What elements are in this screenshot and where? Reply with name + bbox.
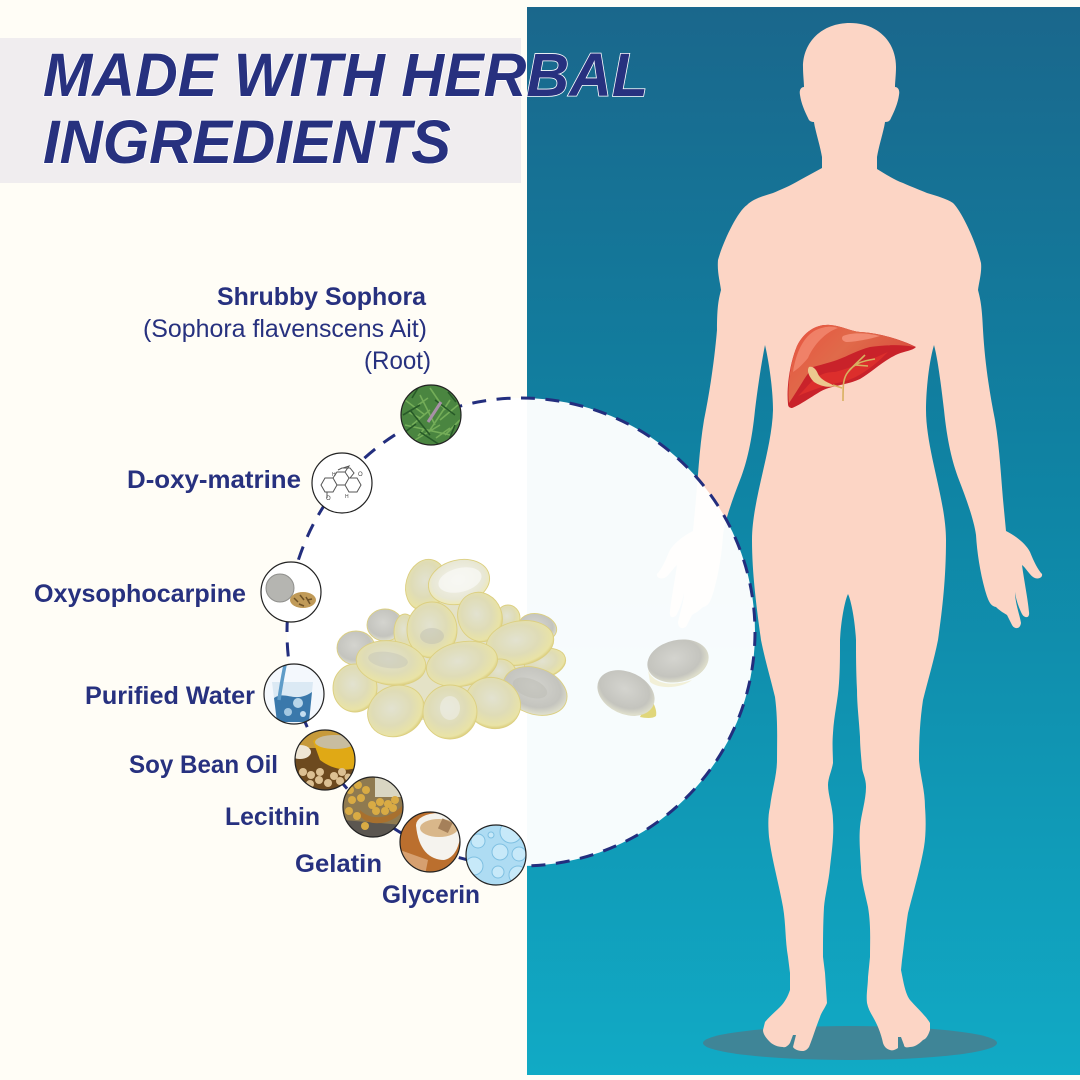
icon: d-oxy-matrine molecule: H <box>332 472 336 478</box>
icon: d-oxy-matrine molecule: H <box>345 494 349 500</box>
ring: purified water <box>264 664 324 724</box>
icon: gelatin bowl <box>400 812 460 872</box>
title band <box>0 38 521 183</box>
label: glycerin: Glycerin <box>382 881 480 909</box>
icon: purified water <box>264 664 324 724</box>
icon: glycerin droplets <box>466 826 526 884</box>
ring: shrubby sophora <box>401 385 461 445</box>
label: shrubby sophora <box>143 283 431 375</box>
capsule pile <box>333 553 574 746</box>
ring: glycerin <box>466 825 526 885</box>
dashed ingredients circle <box>287 398 755 866</box>
ring: gelatin <box>400 812 460 872</box>
label: gelatin: Gelatin <box>295 850 382 878</box>
title <box>43 41 648 176</box>
panel: teal background <box>527 7 1080 1075</box>
ring: lecithin <box>343 777 403 837</box>
icon: oxysophocarpine powder and seeds <box>261 562 321 622</box>
icon: d-oxy-matrine molecule <box>312 453 372 513</box>
label: lecithin: Lecithin <box>225 803 320 831</box>
human body silhouette <box>657 23 1042 1051</box>
floor shadow <box>703 1026 997 1060</box>
label: d-oxy-matrine: D-oxy-matrine <box>127 466 301 494</box>
icon: lecithin <box>344 778 402 836</box>
icon: d-oxy-matrine molecule: O <box>326 496 331 502</box>
loose capsules <box>590 634 713 725</box>
icon: shrubby sophora <box>401 385 461 445</box>
label: soy bean oil: Soy Bean Oil <box>129 751 278 779</box>
ring: soy bean oil <box>295 730 355 790</box>
title: INGREDIENTS <box>43 108 451 176</box>
icon: soy bean oil <box>296 730 354 790</box>
label: oxysophocarpine: Oxysophocarpine <box>34 580 246 608</box>
label: shrubby sophora: (Root) <box>364 347 431 375</box>
title: MADE WITH HERBAL <box>43 41 648 109</box>
label: shrubby sophora: (Sophora flavenscens Ait) <box>143 315 427 343</box>
icon: liver <box>788 325 916 408</box>
label: shrubby sophora: Shrubby Sophora <box>217 283 427 311</box>
label: purified water: Purified Water <box>85 682 255 710</box>
icon: d-oxy-matrine molecule: O <box>358 472 363 478</box>
